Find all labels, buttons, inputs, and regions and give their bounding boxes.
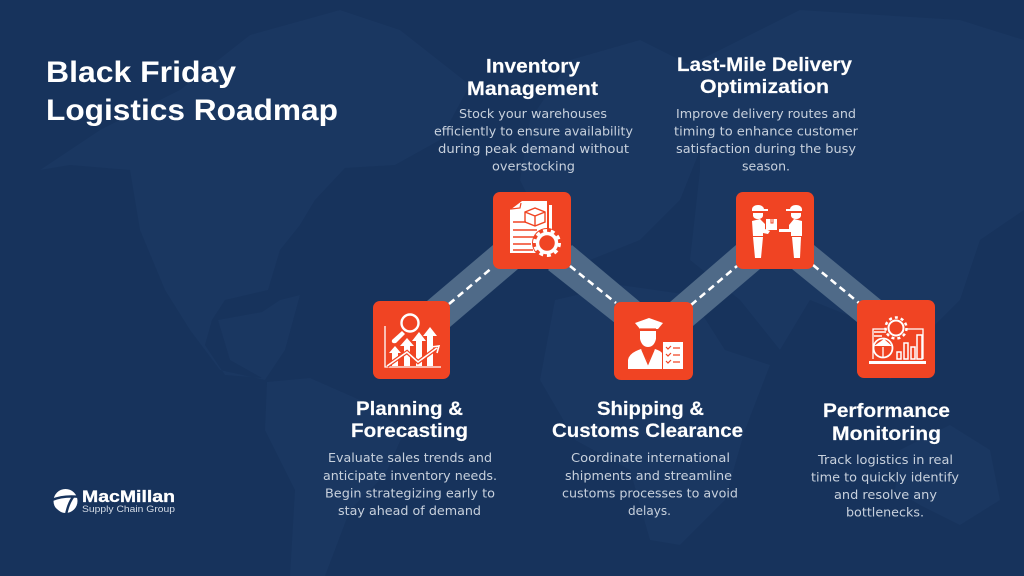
description <box>811 452 960 520</box>
description: stay ahead of demand <box>338 503 481 518</box>
heading <box>467 56 599 100</box>
description: overstocking <box>492 158 575 174</box>
logo: MacMillan Supply Chain Group <box>52 488 175 515</box>
heading <box>823 401 950 445</box>
description <box>674 106 859 174</box>
icon card: two couriers exchanging a parcel <box>736 192 814 269</box>
description: Evaluate sales trends and <box>328 450 492 465</box>
description: Improve delivery routes and <box>676 106 856 121</box>
description: efficiently to ensure availability <box>434 124 634 138</box>
title: Black Friday <box>46 56 236 89</box>
description: anticipate inventory needs. <box>323 468 497 483</box>
description: Coordinate international <box>571 450 730 465</box>
icon card: customs officer with checklist <box>614 302 693 380</box>
description: during peak demand without <box>438 141 629 156</box>
heading: Management <box>467 79 599 100</box>
heading: Last-Mile Delivery <box>677 55 852 76</box>
description: shipments and streamline <box>565 468 732 483</box>
description: Stock your warehouses <box>459 106 607 121</box>
heading: Performance <box>823 401 950 422</box>
panel: last-mile delivery optimization <box>674 55 859 269</box>
connector bands <box>427 245 881 327</box>
heading: Optimization <box>700 77 829 98</box>
panel: performance monitoring <box>811 300 960 520</box>
icon card: laptop dashboard with gear <box>857 300 935 378</box>
description: timing to enhance customer <box>674 124 859 138</box>
heading <box>351 399 468 442</box>
heading <box>677 55 852 98</box>
heading: Planning & <box>356 399 463 420</box>
description: satisfaction during the busy <box>676 141 857 156</box>
panel: planning and forecasting <box>323 301 497 518</box>
heading: Inventory <box>486 56 580 78</box>
logo: MacMillan Supply Chain Group: Supply Chain Group <box>82 504 175 515</box>
heading: Customs Clearance <box>552 421 743 442</box>
description: bottlenecks. <box>846 504 924 520</box>
icon card: chart and magnifier <box>373 301 450 379</box>
heading <box>552 399 743 442</box>
description: and resolve any <box>834 487 938 502</box>
description: time to quickly identify <box>811 470 960 484</box>
panel: inventory management <box>434 56 634 269</box>
description: Begin strategizing early to <box>325 486 495 500</box>
title: Logistics Roadmap <box>46 94 338 127</box>
title <box>46 56 338 127</box>
icon card: document, box and gear <box>493 192 571 269</box>
description: Track logistics in real <box>817 452 953 467</box>
logo: MacMillan Supply Chain Group: MacMillan <box>82 488 175 506</box>
description: season. <box>742 158 790 174</box>
description <box>562 450 738 518</box>
panel: shipping and customs clearance <box>552 302 743 518</box>
description: customs processes to avoid <box>562 486 738 500</box>
dashed connector lines <box>449 265 859 305</box>
description: delays. <box>628 503 671 518</box>
description <box>323 450 497 518</box>
heading: Forecasting <box>351 421 468 442</box>
description <box>434 106 634 174</box>
heading: Monitoring <box>832 424 941 445</box>
heading: Shipping & <box>597 399 704 420</box>
